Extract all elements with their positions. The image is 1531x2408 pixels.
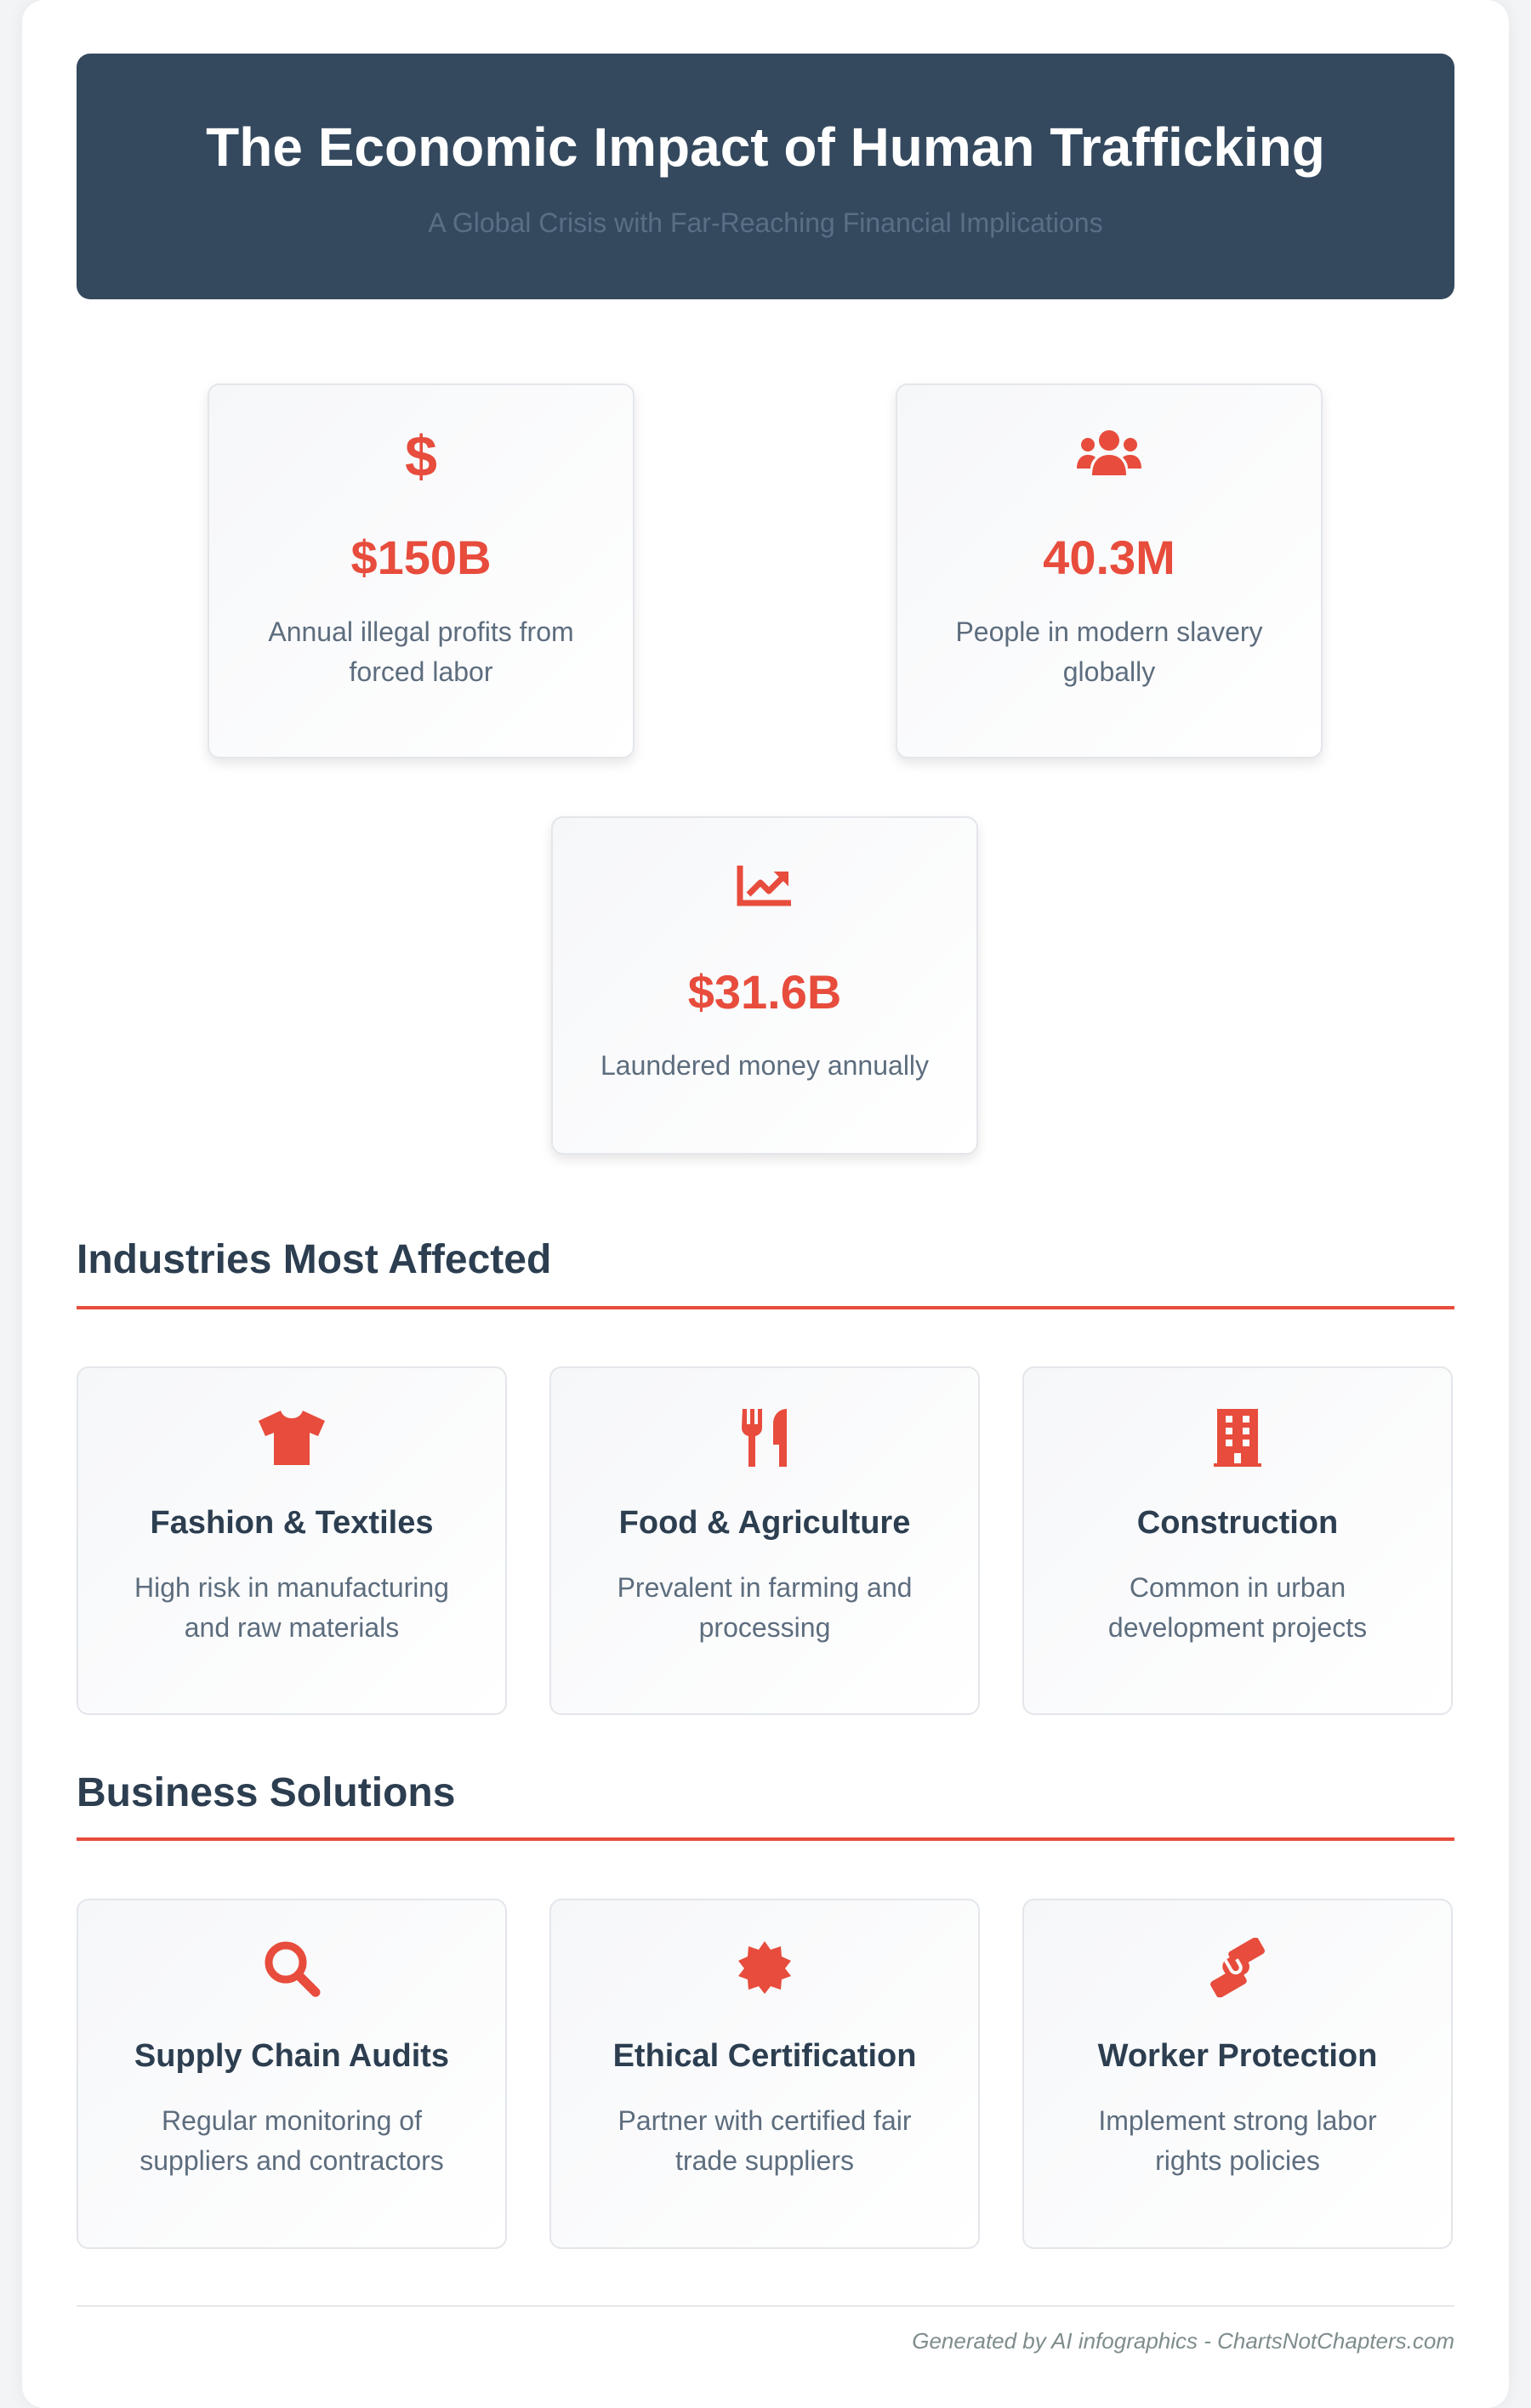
section heading: industries: Industries Most Affected	[77, 1237, 551, 1282]
description: Regular monitoring of	[162, 2105, 422, 2136]
industry card: fashion	[77, 1366, 507, 1715]
icon: shirt	[259, 1411, 325, 1465]
stat card: slavery	[896, 383, 1323, 758]
title: Supply Chain Audits	[134, 2038, 449, 2074]
description: rights policies	[1155, 2145, 1320, 2176]
title: Fashion & Textiles	[151, 1505, 433, 1541]
industry card: construction	[1022, 1366, 1453, 1715]
description: Partner with certified fair	[618, 2105, 912, 2136]
subtitle: A Global Crisis with Far-Reaching Financial Implications	[428, 207, 1103, 238]
icon: badge	[738, 1941, 791, 1994]
description: Common in urban	[1130, 1572, 1346, 1603]
description: and raw materials	[185, 1612, 399, 1643]
stat card: profits	[208, 383, 635, 758]
description	[955, 616, 1263, 687]
title: Construction	[1137, 1505, 1338, 1541]
description	[134, 1572, 449, 1643]
value: $150B	[350, 531, 492, 584]
description	[618, 1572, 912, 1643]
icon: users	[1077, 430, 1141, 475]
description	[1108, 1572, 1367, 1643]
title: The Economic Impact of Human Trafficking	[206, 116, 1325, 178]
title: Food & Agriculture	[619, 1505, 910, 1541]
stat card: laundered	[551, 816, 978, 1155]
icon: magnifier	[265, 1942, 320, 1996]
description: suppliers and contractors	[139, 2145, 444, 2176]
icon: dollar: $	[405, 424, 437, 489]
icon: utensils	[742, 1409, 787, 1467]
description	[618, 2105, 912, 2176]
description: Prevalent in farming and	[618, 1572, 912, 1603]
header	[77, 54, 1454, 299]
description	[268, 616, 574, 687]
description: development projects	[1108, 1612, 1367, 1643]
description: High risk in manufacturing	[134, 1572, 449, 1603]
description: trade suppliers	[675, 2145, 854, 2176]
description: forced labor	[349, 656, 492, 687]
description: Implement strong labor	[1098, 2105, 1377, 2136]
description	[1098, 2105, 1377, 2176]
description: Annual illegal profits from	[268, 616, 574, 647]
description: People in modern slavery	[955, 616, 1263, 647]
value: $31.6B	[688, 965, 841, 1019]
description	[139, 2105, 444, 2176]
section heading: solutions: Business Solutions	[77, 1770, 455, 1815]
description: Laundered money annually	[600, 1050, 929, 1081]
footer: Generated by AI infographics - ChartsNotChapters.com	[912, 2328, 1454, 2354]
description: globally	[1063, 656, 1155, 687]
value: 40.3M	[1043, 531, 1175, 584]
industry card: food	[549, 1366, 980, 1715]
icon: handshake	[1210, 1938, 1265, 1997]
icon: building	[1214, 1409, 1261, 1467]
icon: chart	[737, 866, 791, 906]
title: Worker Protection	[1098, 2038, 1377, 2074]
solution card: certification	[549, 1899, 980, 2249]
description: processing	[699, 1612, 830, 1643]
solution card: audits	[77, 1899, 507, 2249]
solution card: worker protection	[1022, 1899, 1453, 2249]
title: Ethical Certification	[613, 2038, 916, 2074]
